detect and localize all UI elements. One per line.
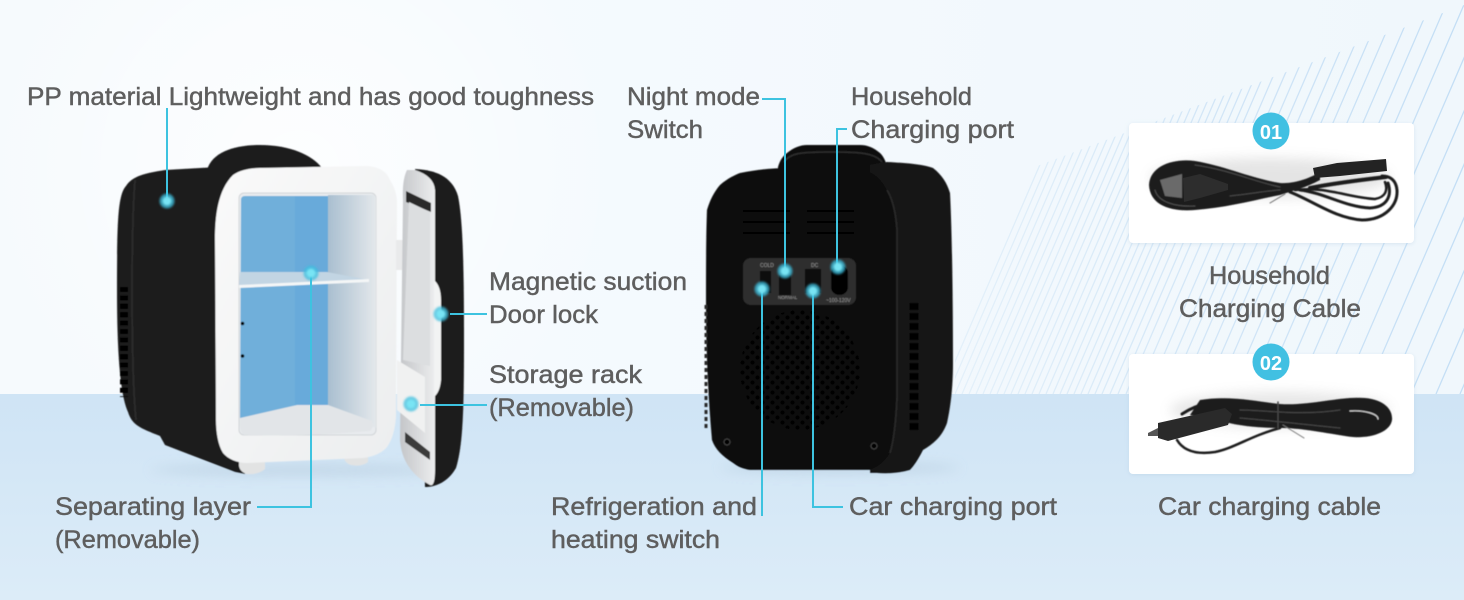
door outer shell bbox=[415, 169, 464, 487]
door gasket top bbox=[406, 191, 431, 212]
label: household charging port bbox=[851, 83, 1014, 144]
marker dots bbox=[160, 194, 846, 412]
back face bbox=[706, 168, 897, 470]
badge 01: 01 bbox=[1260, 122, 1282, 144]
label: storage rack bbox=[489, 361, 643, 422]
leader lines bbox=[167, 99, 847, 516]
label: car charging port: Car charging port bbox=[849, 493, 1057, 521]
panel text: ~100-120V bbox=[826, 298, 851, 304]
label: refrigeration and heating switch: heating switch bbox=[551, 526, 720, 554]
cable soft shadow bbox=[1170, 392, 1390, 428]
shelf edge bbox=[239, 279, 369, 288]
magnetic door lock bbox=[434, 280, 441, 397]
fridge body bbox=[117, 166, 245, 474]
screw holes bbox=[724, 439, 877, 449]
label: household charging cable: Household bbox=[1209, 262, 1330, 290]
feet bbox=[239, 455, 368, 474]
panel text bbox=[760, 263, 851, 304]
door gasket bottom bbox=[405, 432, 430, 460]
label: magnetic door lock bbox=[489, 268, 687, 329]
handle bbox=[778, 145, 887, 178]
interior opening bbox=[239, 193, 376, 435]
DC socket bbox=[805, 269, 821, 293]
label: car charging cable: Car charging cable bbox=[1158, 493, 1381, 521]
side vent bbox=[120, 287, 128, 397]
label: magnetic door lock: Door lock bbox=[489, 301, 599, 329]
label: refrigeration and heating switch: Refrigeration and bbox=[551, 493, 757, 521]
plug bbox=[1183, 174, 1228, 202]
panel text: DC bbox=[811, 263, 819, 269]
product: front view of open mini fridge bbox=[117, 145, 464, 487]
car plug body bbox=[1158, 408, 1232, 441]
shelf pin holes bbox=[241, 322, 244, 358]
label: separating layer: Separating layer bbox=[55, 493, 251, 521]
car plug tip bbox=[1148, 428, 1158, 436]
label: separating layer: (Removable) bbox=[55, 526, 200, 554]
switch 2 bbox=[779, 275, 791, 295]
accessory card 2: car cable bbox=[1129, 344, 1414, 474]
background: upper panel bbox=[0, 0, 1464, 394]
label: storage rack: (Removable) bbox=[489, 394, 634, 422]
product: back view of mini fridge bbox=[706, 145, 960, 474]
hinge bbox=[396, 240, 403, 270]
switch 1 bbox=[760, 271, 771, 293]
label: night mode switch bbox=[627, 83, 760, 144]
background: lower blue band bbox=[0, 394, 1464, 600]
connector bbox=[1313, 159, 1387, 178]
door inner panel bbox=[403, 202, 430, 366]
cable soft shadow bbox=[1150, 158, 1390, 198]
label: magnetic door lock: Magnetic suction bbox=[489, 268, 687, 296]
label: household charging port: Household bbox=[851, 83, 972, 111]
door inner liner bbox=[400, 170, 435, 485]
cable bundle bbox=[1149, 160, 1397, 220]
face edge highlight bbox=[887, 190, 897, 453]
AC socket bbox=[831, 265, 848, 295]
label: household charging cable bbox=[1179, 262, 1361, 323]
floor shadow bbox=[720, 462, 960, 474]
handle bbox=[207, 145, 322, 180]
label: separating layer bbox=[55, 493, 251, 554]
accessory card 1: household cable bbox=[1129, 112, 1414, 243]
body crease bbox=[132, 180, 136, 420]
side of body bbox=[870, 162, 953, 473]
badge 01 bbox=[1252, 112, 1290, 150]
top vents bbox=[743, 211, 854, 233]
label: household charging port: Charging port bbox=[851, 116, 1014, 144]
handle highlight bbox=[784, 152, 882, 162]
separating shelf bbox=[239, 272, 369, 287]
badge 02 bbox=[1252, 344, 1290, 380]
blue wall right section bbox=[295, 196, 328, 414]
blue back wall bbox=[240, 196, 328, 418]
white door frame bbox=[215, 166, 397, 463]
right interior wall bbox=[328, 195, 376, 428]
label: night mode switch: Night mode bbox=[627, 83, 760, 111]
floor shadow bbox=[150, 464, 450, 476]
left edge ribs bbox=[704, 305, 708, 430]
panel text: NORMAL bbox=[778, 295, 798, 300]
label: storage rack: Storage rack bbox=[489, 361, 643, 389]
panel text: COLD bbox=[760, 263, 774, 269]
badge 02: 02 bbox=[1260, 353, 1282, 375]
label: night mode switch: Switch bbox=[627, 116, 703, 144]
background: soft glow bbox=[0, 0, 800, 394]
label: PP material: PP material Lightweight and has good toughness bbox=[27, 83, 594, 111]
speaker grille bbox=[740, 310, 860, 430]
control panel bbox=[743, 258, 856, 305]
background: diagonal stripes bbox=[941, 0, 1464, 394]
interior floor bbox=[240, 405, 373, 436]
cable bundle bbox=[1177, 398, 1392, 453]
label: refrigeration and heating switch bbox=[551, 493, 757, 554]
storage rack bbox=[397, 360, 425, 433]
side vents bbox=[910, 303, 918, 430]
label: household charging cable: Charging Cable bbox=[1179, 295, 1361, 323]
